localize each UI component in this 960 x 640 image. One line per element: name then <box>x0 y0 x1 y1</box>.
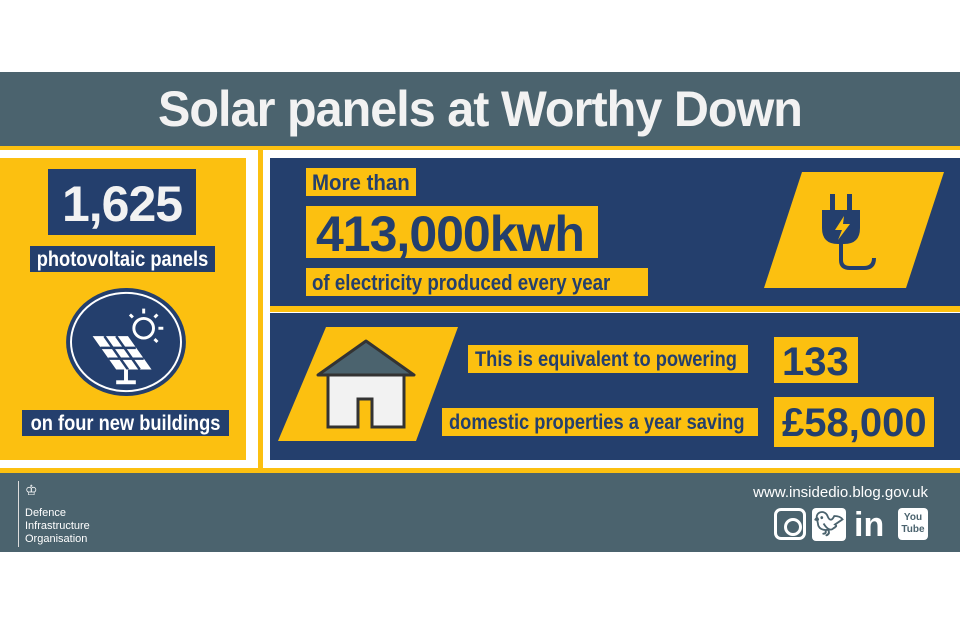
footer <box>0 473 960 552</box>
number 1,625: 1,625 <box>62 176 182 232</box>
logo: Defence Infrastructure Organisation: Organisation <box>25 533 87 545</box>
text: This is equivalent to powering: This is equivalent to powering <box>475 348 737 371</box>
social icons: in <box>854 506 884 544</box>
text: More than: More than <box>312 170 410 195</box>
url: www.insidedio.blog.gov.uk <box>753 484 928 501</box>
header band <box>0 72 960 146</box>
text: domestic properties a year saving: domestic properties a year saving <box>449 411 744 434</box>
social icons: You <box>904 512 922 523</box>
big number 413,000kwh: 413,000kwh <box>316 206 584 262</box>
number £58,000: £58,000 <box>782 401 927 445</box>
panel: left panels count <box>0 158 246 460</box>
logo: Defence Infrastructure Organisation: ♔ <box>25 482 38 498</box>
logo: Defence Infrastructure Organisation <box>18 481 99 547</box>
icon: house <box>278 327 458 441</box>
text: of electricity produced every year: of electricity produced every year <box>312 270 610 295</box>
logo: Defence Infrastructure Organisation: Defence <box>25 507 66 519</box>
label photovoltaic panels: photovoltaic panels <box>37 248 208 271</box>
icon: solar panel <box>66 288 186 396</box>
social icons: Tube <box>901 524 925 535</box>
panel: electricity <box>270 158 960 306</box>
social icons <box>774 506 928 544</box>
panel: households <box>270 313 960 460</box>
number 133: 133 <box>782 340 849 384</box>
icon: plug <box>764 172 944 288</box>
title: Solar panels at Worthy Down <box>158 81 802 137</box>
logo: Defence Infrastructure Organisation: Infrastructure <box>25 520 90 532</box>
number 1,625 <box>48 169 196 235</box>
social icons: 🐦︎ <box>814 511 844 538</box>
label on four new buildings: on four new buildings <box>31 412 220 435</box>
